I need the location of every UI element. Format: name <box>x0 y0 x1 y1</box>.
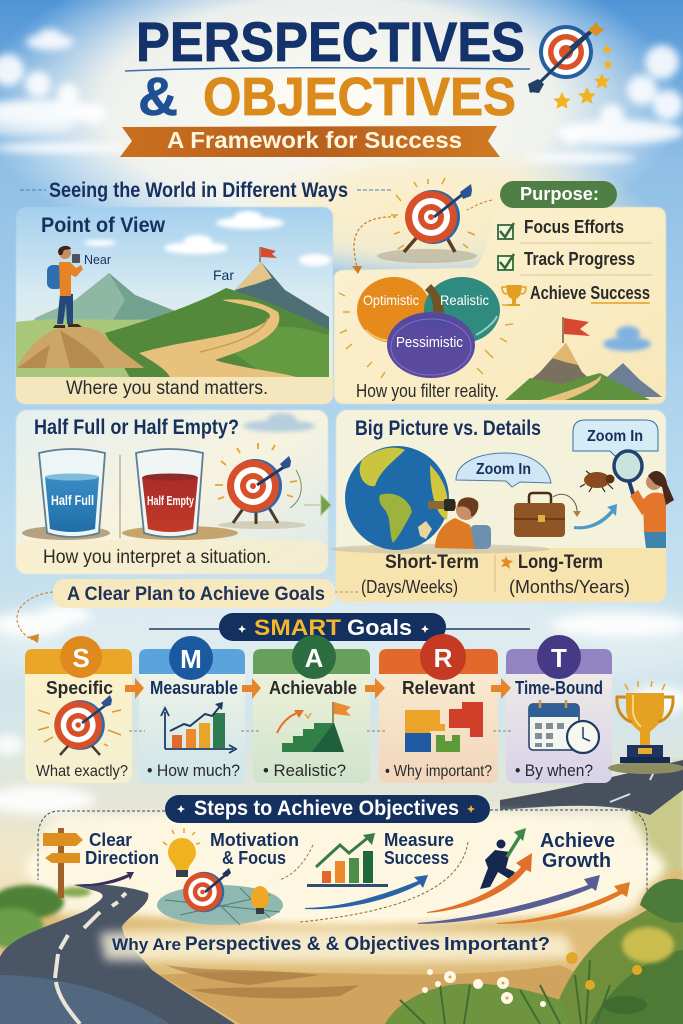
card: specific: Specific <box>46 678 113 698</box>
step: clear direction <box>85 830 159 868</box>
title <box>125 10 530 127</box>
icon: boy with telescope <box>428 497 491 549</box>
closing question <box>100 929 575 962</box>
icon: small mountain with flag <box>505 317 662 400</box>
card: time-bound <box>506 635 612 783</box>
road <box>0 884 235 1024</box>
heading: smart goals: Goals <box>347 615 412 640</box>
icon: briefcase <box>514 493 565 537</box>
icon: signpost <box>43 828 83 898</box>
icon: lightbulb <box>163 828 200 877</box>
step: motivation and focus <box>210 830 299 868</box>
card: time-bound: • By when? <box>515 761 593 780</box>
card: achievable: Achievable <box>269 678 357 698</box>
heading: Half Full or Half Empty? <box>34 416 239 439</box>
caption: How you interpret a situation. <box>43 547 271 568</box>
arrow: orange <box>497 882 630 924</box>
glass: half full: Half Full <box>51 492 94 508</box>
icon: target on easel <box>377 178 477 263</box>
heading pill: Steps to Achieve Objectives <box>194 797 459 820</box>
step: achieve growth: Growth <box>542 850 611 872</box>
arrow: dashed to target <box>467 200 492 210</box>
glass: half full <box>22 449 110 540</box>
heading: smart goals <box>149 613 530 641</box>
label: near: Near <box>84 252 112 267</box>
ground <box>620 760 683 880</box>
panel: point of view <box>16 207 333 404</box>
heading: smart goals: SMART <box>254 615 342 640</box>
far mountain scene <box>16 247 329 378</box>
card: achievable: • Realistic? <box>263 761 346 780</box>
timeframe labels: Long-Term <box>518 552 603 573</box>
glass: half empty: Half Empty <box>147 493 195 508</box>
card: relevant: Relevant <box>402 678 475 698</box>
card: time-bound: Time-Bound <box>515 678 603 698</box>
dashed connector <box>300 842 468 922</box>
smart cards <box>25 634 612 783</box>
card: relevant: • Why important? <box>385 763 492 780</box>
arrow: purple <box>418 875 600 924</box>
arrow: curve from briefcase <box>553 494 577 511</box>
step: measure success: Success <box>384 848 449 868</box>
arrow: blue rising <box>574 504 617 529</box>
title: PERSPECTIVES <box>136 10 525 73</box>
subtitle banner <box>120 126 500 157</box>
icon: target on stand <box>215 443 306 529</box>
step: achieve growth <box>540 830 615 872</box>
step: motivation and focus: & Focus <box>222 848 286 868</box>
checklist: Track Progress <box>524 249 635 269</box>
caption: How you filter reality. <box>356 381 499 401</box>
card: relevant <box>379 634 498 783</box>
card: specific: What exactly? <box>36 763 128 780</box>
icon: gold trophy <box>608 681 683 774</box>
venn diagram: filters: Pessimistic <box>396 334 463 351</box>
arrows between cards <box>125 678 511 699</box>
rock <box>17 327 144 368</box>
arrowhead <box>352 266 362 274</box>
panel: purpose and filters <box>334 178 666 404</box>
arrow: dashed to venn <box>354 217 396 268</box>
step: measure success: Measure <box>384 830 454 850</box>
card: measurable: M <box>180 644 202 674</box>
timeframe labels: (Months/Years) <box>509 577 630 597</box>
speech bubble: zoom in top <box>573 420 658 456</box>
heading: Big Picture vs. Details <box>355 417 541 440</box>
icon: girl looking through lens <box>630 471 674 548</box>
foliage and flowers <box>385 879 683 1024</box>
title: OBJECTIVES <box>203 67 516 127</box>
panel: half full or half empty <box>16 410 331 574</box>
checklist: Achieve Success <box>530 283 650 303</box>
panel: big picture vs details <box>330 410 674 602</box>
arrow: orange climbing <box>427 853 532 913</box>
purpose pill: Purpose: <box>520 184 599 204</box>
step: clear direction: Direction <box>85 848 159 868</box>
venn diagram: filters: Optimistic <box>363 292 419 308</box>
timeframe labels: Short-Term <box>385 552 479 573</box>
step: achieve growth: Achieve <box>540 830 615 852</box>
card: measurable <box>139 636 245 783</box>
speech bubble: zoom in middle: Zoom In <box>476 461 531 478</box>
panel: steps to achieve objectives <box>0 795 665 1024</box>
step: motivation and focus: Motivation <box>210 830 299 850</box>
dashed connector <box>279 845 313 880</box>
arrow: dark purple <box>74 872 134 886</box>
card: measurable: • How much? <box>147 761 240 780</box>
card: specific: S <box>72 643 90 673</box>
checklist: Focus Efforts <box>524 217 624 237</box>
heading pill: clear plan: A Clear Plan to Achieve Goals <box>67 584 325 605</box>
caption: Where you stand matters. <box>66 378 268 399</box>
panel heading: Point of View <box>41 214 166 237</box>
far road <box>500 760 683 815</box>
step: clear direction: Clear <box>89 830 132 850</box>
icon: title target with arrow and stars <box>528 22 613 109</box>
icon: globe <box>345 446 449 550</box>
venn diagram: filters <box>339 277 513 378</box>
venn diagram: filters: Realistic <box>440 292 489 308</box>
card: specific <box>25 636 132 783</box>
speech bubble: zoom in top: Zoom In <box>587 428 643 445</box>
caption band <box>16 377 333 404</box>
label: far: Far <box>213 267 234 283</box>
title: & <box>138 67 178 127</box>
checklist <box>498 217 652 306</box>
card: relevant: R <box>434 643 453 673</box>
icon: runner climbing <box>480 828 526 889</box>
arrow: blue <box>305 875 428 909</box>
section heading: seeing the world: Seeing the World in Different Ways <box>49 179 348 202</box>
arrow: green <box>304 495 331 515</box>
arrowhead <box>573 511 581 517</box>
icon: target on map <box>157 868 283 925</box>
icon: growth chart <box>307 833 388 887</box>
icon: beetle <box>580 471 614 492</box>
icon: hiker with backpack <box>47 246 83 328</box>
timeframe labels <box>361 552 630 597</box>
heading pill: clear plan <box>17 579 359 643</box>
left shrubs <box>0 885 91 948</box>
icon: magnifying glass <box>614 451 642 497</box>
step: measure success <box>384 830 454 868</box>
icon: small trophy <box>502 285 526 306</box>
clouds <box>84 211 331 266</box>
card: measurable: Measurable <box>150 678 238 698</box>
card: achievable <box>253 635 370 783</box>
timeframe labels: (Days/Weeks) <box>361 577 458 597</box>
glass: half empty <box>122 449 238 540</box>
card: achievable: A <box>305 643 324 673</box>
purpose pill <box>500 181 617 208</box>
cloud <box>243 413 315 432</box>
speech bubble: zoom in middle <box>456 453 551 487</box>
card: time-bound: T <box>551 643 567 673</box>
closing question: Important? <box>444 934 550 954</box>
closing question: Why Are <box>112 935 181 954</box>
subtitle banner: A Framework for Success <box>167 127 462 153</box>
closing question: Perspectives & & Objectives <box>185 934 440 955</box>
